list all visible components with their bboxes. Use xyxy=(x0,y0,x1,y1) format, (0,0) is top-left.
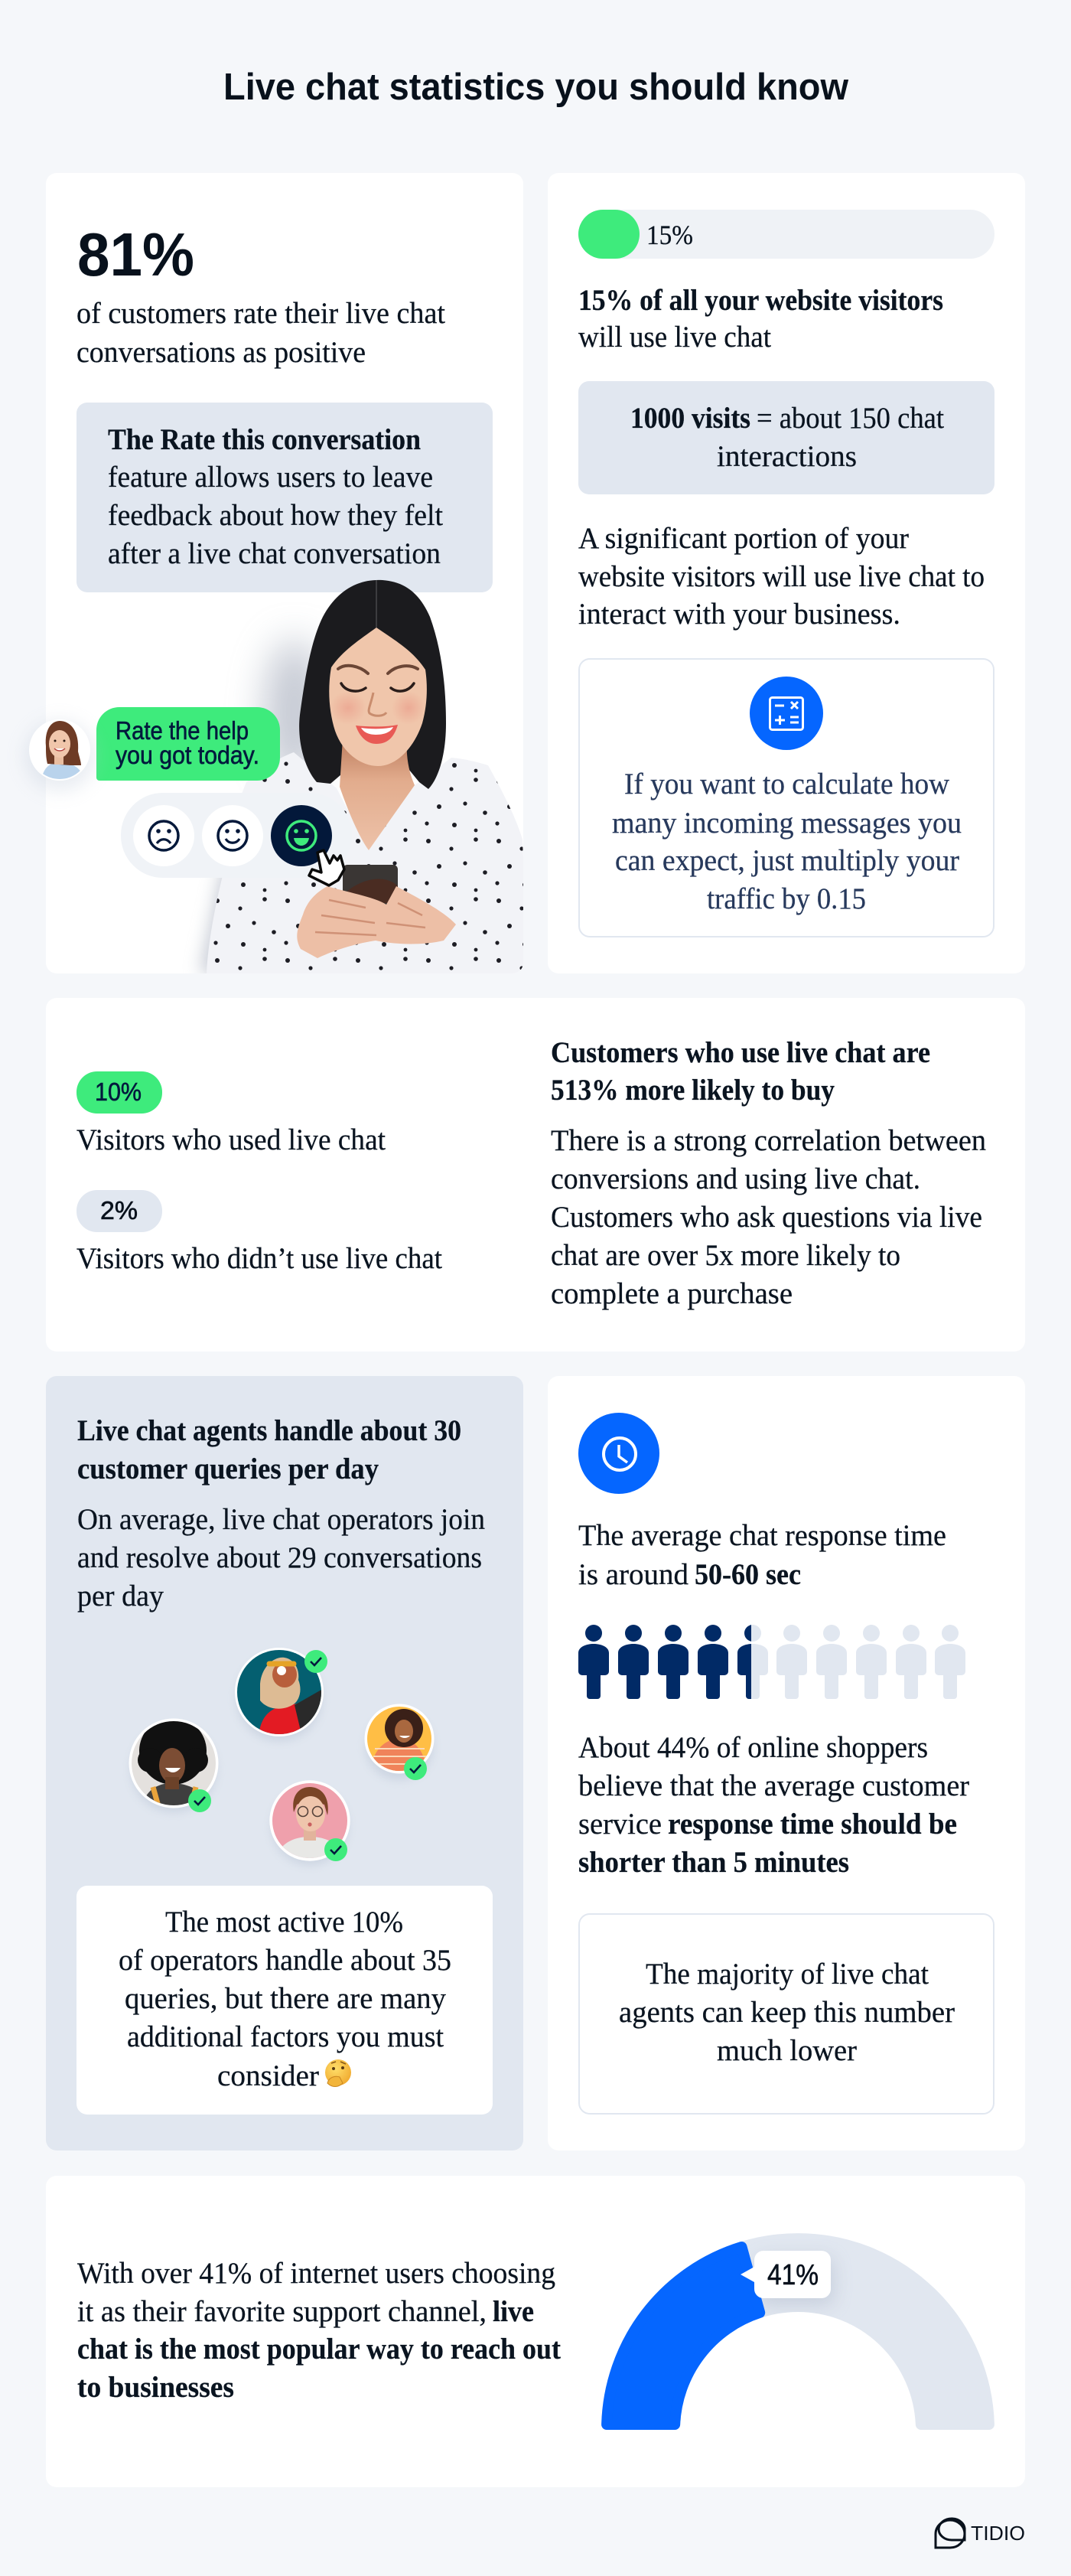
text: visitors xyxy=(578,284,943,354)
chat bubble: you got today. xyxy=(116,741,259,769)
avatar: curly hair xyxy=(126,1717,222,1812)
callout: rate this conversation: feature allows users to leave xyxy=(108,461,433,494)
status check xyxy=(304,1650,327,1673)
callout: rate this conversation: after a live chat conversation xyxy=(108,537,441,570)
text: correlation xyxy=(551,1124,986,1310)
icon: happy face selected xyxy=(271,805,332,866)
status check xyxy=(324,1838,347,1861)
icon: smiling face xyxy=(202,805,263,866)
pictogram: people 44 percent xyxy=(578,1625,965,1699)
heading: 513%: 513% more likely to buy xyxy=(551,1074,835,1107)
gauge chart 41% xyxy=(607,2239,989,2424)
callout: most active operators: The most active 10% xyxy=(165,1906,403,1939)
text: average operators: per day xyxy=(77,1580,164,1612)
logo: Tidio xyxy=(936,2519,1025,2548)
text: customers rating xyxy=(76,297,445,369)
callout: most active operators: additional factors you must xyxy=(127,2020,444,2053)
label: visitors who did not: Visitors who didn’t use live chat xyxy=(76,1242,442,1275)
text: 44 percent of shoppers xyxy=(578,1731,969,1879)
text: 44 percent of shoppers: believe that the average customer xyxy=(578,1769,969,1802)
agent avatar xyxy=(24,719,95,791)
outlined tip box: many incoming messages you xyxy=(612,807,962,840)
text: 41 percent of users xyxy=(77,2257,561,2404)
pill: 10%: 10% xyxy=(95,1078,142,1106)
outlined note box xyxy=(579,1914,994,2114)
outlined note box: agents can keep this number xyxy=(619,1996,955,2029)
text: customers rating: conversations as positive xyxy=(76,336,366,369)
outlined note box: much lower xyxy=(717,2034,857,2067)
text: 41 percent of users: live xyxy=(493,2295,534,2328)
panel: agents handle queries xyxy=(46,1376,523,2150)
callout: most active operators: consider xyxy=(217,2059,319,2092)
rating control xyxy=(121,793,352,885)
callout: most active operators xyxy=(76,1886,493,2115)
panel: 81% positive ratings xyxy=(24,173,528,973)
text: 41 percent of users: chat is the most popular way to reach out xyxy=(77,2333,561,2366)
label: visitors who used: Visitors who used live chat xyxy=(76,1123,386,1156)
logo: Tidio: TIDIO xyxy=(971,2522,1025,2545)
title: Live chat statistics you should know xyxy=(223,67,849,108)
text: visitors: 15% of all your website visitors xyxy=(578,284,943,317)
text: significant portion: interact with your business. xyxy=(578,598,900,631)
icon: clock xyxy=(578,1413,659,1494)
text: significant portion: A significant portion of your xyxy=(578,522,909,555)
text: correlation: chat are over 5x more likely to xyxy=(551,1239,900,1272)
panel: response time xyxy=(548,1376,1025,2150)
icon: sad face xyxy=(133,805,194,866)
callout: rate this conversation xyxy=(76,403,493,592)
heading: 513%: Customers who use live chat are xyxy=(551,1036,930,1069)
callout: rate this conversation: The Rate this conversation xyxy=(108,423,421,456)
outlined note box: The majority of live chat xyxy=(646,1958,929,1991)
status check xyxy=(188,1789,211,1812)
text: correlation: Customers who ask questions via live xyxy=(551,1201,982,1234)
text: response time: is around xyxy=(578,1558,688,1591)
text: significant portion: website visitors will use live chat to xyxy=(578,560,985,593)
callout: rate this conversation: feedback about how they felt xyxy=(108,499,443,532)
heading: 30 queries: Live chat agents handle about 30 xyxy=(77,1414,461,1447)
avatar: pink background xyxy=(268,1779,352,1865)
outlined tip box: can expect, just multiply your xyxy=(615,844,959,877)
text: visitors: will use live chat xyxy=(578,321,771,354)
panel: 513% more likely to buy xyxy=(46,998,1025,1352)
tooltip: 41% xyxy=(741,2251,831,2298)
heading: 30 queries xyxy=(77,1414,461,1485)
text: correlation: There is a strong correlation between xyxy=(551,1124,986,1157)
progress bar: 15% xyxy=(646,220,693,250)
callout: 1000 visits: interactions xyxy=(717,440,857,473)
icon: thinking face emoji xyxy=(325,2059,351,2086)
big number 81%: 81% xyxy=(77,220,194,289)
panel: 15% of visitors xyxy=(548,173,1025,973)
text: 44 percent of shoppers: service xyxy=(578,1808,662,1841)
progress bar xyxy=(578,210,994,259)
callout: most active operators: of operators handle about 35 xyxy=(119,1944,451,1977)
outlined tip box: If you want to calculate how xyxy=(624,768,949,801)
heading: 30 queries: customer queries per day xyxy=(77,1453,379,1485)
heading: 513% xyxy=(551,1036,930,1107)
tooltip: 41%: 41% xyxy=(767,2259,819,2291)
callout: 1000 visits: 1000 visits xyxy=(630,402,750,435)
text: 41 percent of users: to businesses xyxy=(77,2371,234,2404)
text: average operators xyxy=(77,1503,485,1612)
text: 44 percent of shoppers: shorter than 5 minutes xyxy=(578,1846,849,1879)
text: response time: The average chat response time xyxy=(578,1519,946,1552)
callout: 1000 visits: = about 150 chat xyxy=(757,402,944,435)
chat bubble xyxy=(96,707,280,781)
text: correlation: conversions and using live chat. xyxy=(551,1162,920,1195)
outlined tip box xyxy=(579,659,994,937)
text: 44 percent of shoppers: About 44% of online shoppers xyxy=(578,1731,928,1764)
callout: most active operators: queries, but there are many xyxy=(125,1982,446,2015)
callout: 1000 visits xyxy=(578,381,994,494)
chat bubble: Rate the help xyxy=(116,716,249,745)
text: response time: 50-60 sec xyxy=(695,1558,801,1591)
avatar: orange background xyxy=(363,1703,436,1780)
pill: 2% xyxy=(76,1190,162,1232)
pill: 2%: 2% xyxy=(100,1196,138,1224)
avatar: teal background xyxy=(233,1645,327,1741)
status check xyxy=(404,1757,427,1780)
icon: pointer cursor xyxy=(309,850,344,885)
text: correlation: complete a purchase xyxy=(551,1277,793,1310)
text: 44 percent of shoppers: response time should be xyxy=(668,1808,957,1841)
text: average operators: and resolve about 29 conversations xyxy=(77,1541,482,1574)
icon: calculator xyxy=(750,677,823,750)
panel: most popular channel xyxy=(46,2176,1025,2487)
photo: woman holding a phone xyxy=(200,580,528,973)
pill: 10% xyxy=(76,1071,162,1114)
text: 41 percent of users: With over 41% of internet users choosing xyxy=(77,2257,555,2290)
text: average operators: On average, live chat operators join xyxy=(77,1503,485,1536)
text: 41 percent of users: it as their favorite support channel, xyxy=(77,2295,487,2328)
text: customers rating: of customers rate their live chat xyxy=(76,297,445,330)
text: significant portion xyxy=(578,522,985,631)
text: response time xyxy=(578,1519,946,1591)
outlined tip box: traffic by 0.15 xyxy=(707,882,866,915)
